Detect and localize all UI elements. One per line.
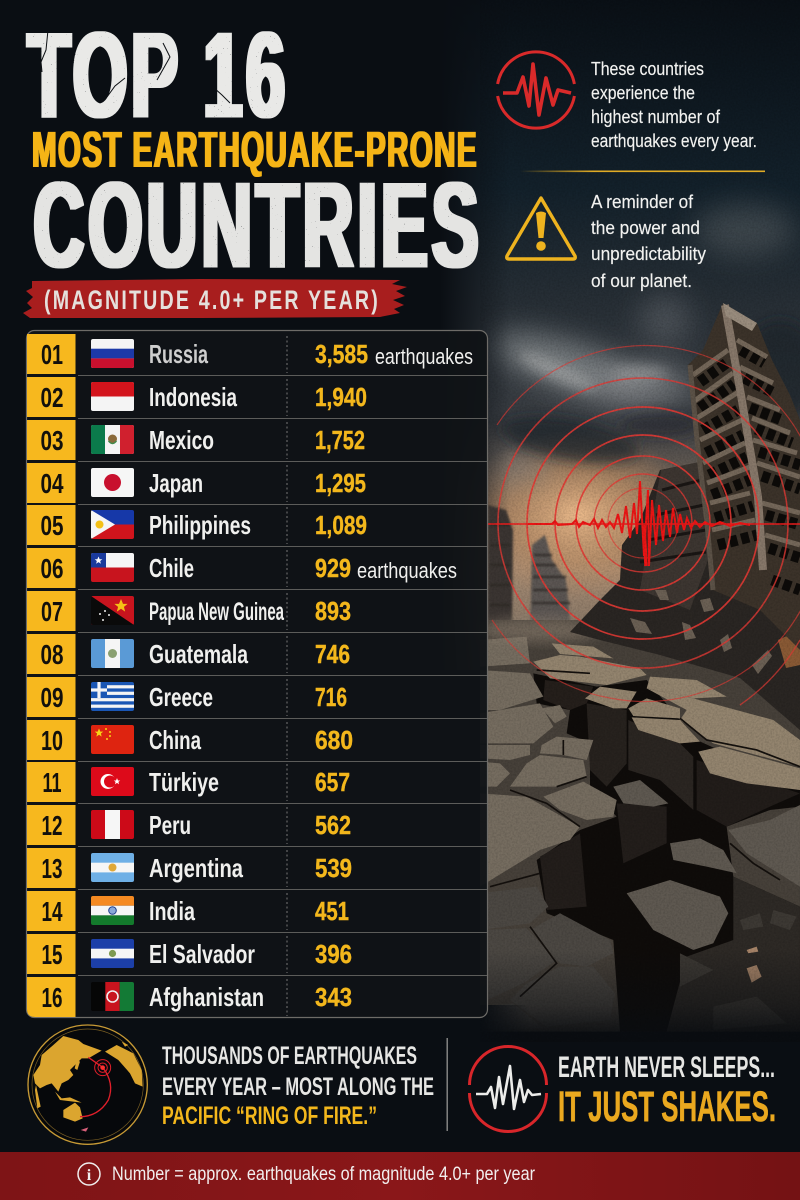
flag: China — [91, 725, 134, 754]
brush banner: magnitude note: (MAGNITUDE 4.0+ PER YEAR) — [44, 285, 380, 315]
row 04 Japan — [27, 463, 487, 504]
row 15 El Salvador: 396 — [315, 939, 352, 969]
cracked ground — [480, 620, 800, 1032]
row 09 Greece: Greece — [149, 682, 213, 712]
row 11 Türkiye: 657 — [315, 767, 350, 797]
icon: info — [78, 1163, 100, 1185]
row 05 Philippines — [27, 505, 487, 546]
flag: Japan — [91, 468, 134, 497]
row 07 Papua New Guinea — [27, 591, 487, 632]
flag: Papua New Guinea — [91, 596, 134, 625]
brush banner: magnitude note — [23, 279, 407, 318]
text: thousands of earthquakes: THOUSANDS OF EARTHQUAKES — [162, 1042, 417, 1070]
text: these countries: highest number of — [591, 107, 721, 127]
row 08 Guatemala — [27, 634, 487, 676]
text: thousands of earthquakes: EVERY YEAR – MOST ALONG THE — [162, 1073, 434, 1101]
row 11 Türkiye — [27, 762, 487, 804]
row 16 Afghanistan: Afghanistan — [149, 982, 264, 1012]
flag: Peru — [91, 810, 134, 839]
title: countries: COUNTRIES — [34, 157, 482, 293]
flag: India — [91, 896, 134, 925]
row 07 Papua New Guinea: 07 — [41, 596, 63, 627]
row 01 Russia: 3,585 — [315, 339, 368, 369]
row 06 Chile: earthquakes — [357, 558, 457, 583]
distant ruined towers — [488, 505, 572, 640]
row 10 China — [27, 720, 487, 762]
row 12 Peru: Peru — [149, 810, 191, 840]
text: a reminder: A reminder of — [591, 192, 694, 212]
row 03 Mexico: 03 — [40, 425, 64, 456]
text: these countries: These countries — [591, 59, 704, 79]
title: TOP 16: TOP 16 — [28, 7, 288, 143]
icon: warning triangle — [507, 198, 575, 259]
row 02 Indonesia — [27, 377, 487, 418]
row 05 Philippines: 05 — [40, 510, 64, 541]
subtitle: most earthquake-prone: MOST EARTHQUAKE-PRONE — [32, 121, 478, 178]
flag: Chile — [91, 553, 134, 582]
grain texture over photo — [480, 0, 800, 1042]
row 11 Türkiye: Türkiye — [149, 767, 219, 797]
row 13 Argentina: Argentina — [149, 853, 243, 883]
row 15 El Salvador: El Salvador — [149, 939, 255, 969]
row 15 El Salvador: 15 — [42, 939, 62, 970]
flag: Guatemala — [91, 639, 134, 668]
flag: Russia — [91, 339, 134, 368]
row 07 Papua New Guinea: Papua New Guinea — [149, 598, 285, 626]
row 14 India — [27, 891, 487, 932]
row 10 China: 680 — [315, 725, 353, 755]
row 06 Chile: 929 — [315, 553, 351, 583]
row 12 Peru: 12 — [42, 810, 62, 841]
text: a reminder: unpredictability — [591, 244, 706, 264]
sky — [440, 0, 800, 670]
row 06 Chile: 06 — [40, 553, 64, 584]
row 08 Guatemala: 08 — [40, 639, 64, 670]
text: a reminder: the power and — [591, 218, 700, 238]
row 01 Russia: 01 — [41, 339, 63, 370]
row 03 Mexico: Mexico — [149, 425, 214, 455]
flag: Mexico — [91, 425, 134, 454]
text: a reminder — [591, 192, 706, 291]
text: a reminder: of our planet. — [591, 271, 692, 291]
text: these countries: experience the — [591, 83, 695, 103]
row 02 Indonesia: Indonesia — [149, 382, 237, 412]
row 09 Greece: 716 — [315, 682, 347, 712]
icon: globe with ring of fire — [28, 1025, 147, 1144]
rubble mound — [570, 462, 800, 730]
collapsing tower — [688, 303, 800, 650]
row 04 Japan: 04 — [40, 468, 64, 499]
row 01 Russia: Russia — [149, 339, 208, 369]
flag: Indonesia — [91, 382, 134, 411]
row 13 Argentina: 539 — [315, 853, 352, 883]
footer bar: Number = approx. earthquakes of magnitude 4.0+ per year — [112, 1164, 536, 1185]
intro point: seismic icon and text — [498, 52, 757, 151]
row 12 Peru: 562 — [315, 810, 351, 840]
slogan — [558, 1051, 776, 1131]
text: thousands of earthquakes: PACIFIC “RING OF FIRE.” — [162, 1102, 377, 1130]
intro point: warning icon and text — [507, 192, 706, 291]
row 04 Japan: 1,295 — [315, 468, 366, 498]
row 08 Guatemala: 746 — [315, 639, 350, 669]
row 05 Philippines: Philippines — [149, 510, 251, 540]
background photo: ruined city and cracked ground — [440, 0, 800, 1042]
title block — [28, 7, 482, 293]
row 09 Greece — [27, 677, 487, 718]
flag: Philippines — [91, 510, 134, 539]
row 10 China: China — [149, 725, 201, 755]
flag: Argentina — [91, 853, 134, 882]
seismic rings and seismograph trace — [486, 346, 800, 705]
row 14 India: India — [149, 896, 195, 926]
row 12 Peru — [27, 805, 487, 846]
row 03 Mexico: 1,752 — [315, 425, 365, 455]
row 14 India: 14 — [42, 896, 63, 927]
icon: white seismograph in red circle — [470, 1046, 546, 1132]
flag: El Salvador — [91, 939, 134, 968]
row 06 Chile — [27, 548, 487, 590]
flag: Afghanistan — [91, 982, 134, 1011]
flag: Greece — [91, 682, 134, 711]
row 03 Mexico — [27, 420, 487, 462]
row 10 China: 10 — [41, 725, 63, 756]
row 05 Philippines: 1,089 — [315, 510, 367, 540]
flag: Türkiye — [91, 767, 134, 796]
row 16 Afghanistan: 16 — [42, 982, 62, 1013]
row 01 Russia — [27, 334, 487, 376]
row 06 Chile: Chile — [149, 553, 194, 583]
row 15 El Salvador — [27, 934, 487, 976]
row 13 Argentina — [27, 848, 487, 890]
icon: seismograph in circle — [498, 52, 574, 128]
row 02 Indonesia: 02 — [40, 382, 64, 413]
row 16 Afghanistan — [27, 977, 352, 1017]
row 09 Greece: 09 — [40, 682, 64, 713]
row 13 Argentina: 13 — [42, 853, 62, 884]
row 11 Türkiye: 11 — [42, 767, 62, 798]
panel: ranking table — [26, 330, 488, 1018]
row 02 Indonesia: 1,940 — [315, 382, 367, 412]
row 07 Papua New Guinea: 893 — [315, 596, 351, 626]
row 04 Japan: Japan — [149, 468, 203, 498]
text: these countries — [591, 59, 757, 151]
icon: info: i — [87, 1167, 92, 1184]
text: these countries: earthquakes every year. — [591, 131, 757, 151]
row 08 Guatemala: Guatemala — [149, 639, 248, 669]
text: thousands of earthquakes — [162, 1042, 434, 1130]
row 14 India: 451 — [315, 896, 349, 926]
row 16 Afghanistan: 343 — [315, 982, 352, 1012]
footer bar — [0, 1152, 800, 1200]
row 01 Russia: earthquakes — [375, 344, 473, 369]
